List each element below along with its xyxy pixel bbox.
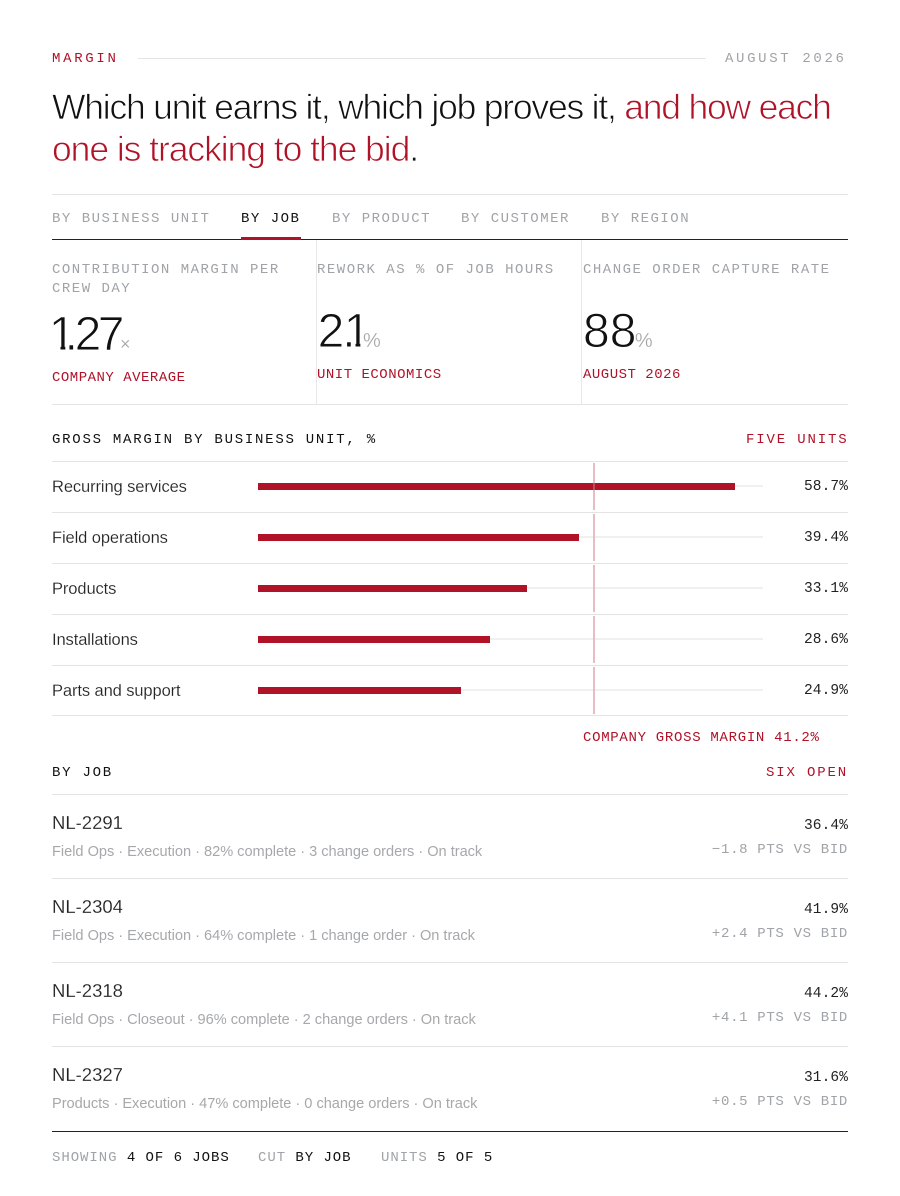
KPI: change order capture: AUGUST 2026 [583, 367, 681, 383]
KPI: rework: UNIT ECONOMICS [317, 367, 442, 383]
heading note: six open: SIX OPEN [766, 765, 848, 781]
job list [52, 812, 848, 1112]
job list: +2.4 PTS VS BID [712, 926, 848, 942]
KPI: contribution margin: .27× [65, 308, 131, 361]
footer status: SHOWING 4 OF 6 JOBS [52, 1150, 230, 1166]
job list: 36.4% [804, 818, 848, 834]
bar chart: 33.1% [804, 581, 848, 597]
KPI: change order capture [583, 262, 831, 383]
row: installations: Installations [52, 631, 138, 649]
KPI: contribution margin: COMPANY AVERAGE [52, 370, 186, 386]
job list: Field Ops · Execution · 82% complete · 3 change orders · On track [52, 844, 482, 860]
bar chart: 28.6% [804, 632, 848, 648]
bar chart: 58.7% [804, 479, 848, 495]
page: UNITS 5 OF 5 [381, 1150, 493, 1166]
bar chart: 39.4% [804, 530, 848, 546]
KPI: contribution margin: CREW DAY [52, 281, 131, 297]
tabs: BY REGION [601, 211, 690, 227]
job list: Field Ops · Closeout · 96% complete · 2 change orders · On track [52, 1012, 476, 1028]
job: NL-2291: NL-2291 [52, 812, 123, 833]
title [52, 87, 831, 169]
eyebrow: date: AUGUST 2026 [725, 51, 847, 67]
company margin reference line [593, 463, 595, 714]
page: CUT BY JOB [258, 1150, 352, 1166]
heading: by job: BY JOB [52, 765, 113, 781]
title: Which unit earns it, which job proves it, and how each [52, 87, 831, 127]
tabs: BY JOB [241, 211, 300, 227]
KPI: contribution margin [52, 262, 280, 386]
reference line label: COMPANY GROSS MARGIN 41.2% [583, 730, 820, 746]
job list: +4.1 PTS VS BID [712, 1010, 848, 1026]
eyebrow: margin: MARGIN [52, 51, 119, 67]
KPI: rework [317, 262, 555, 383]
tabs [52, 211, 690, 227]
row: recurring services: Recurring services [52, 478, 187, 496]
KPI: contribution margin: 1 [49, 308, 75, 361]
KPI: change order capture: CHANGE ORDER CAPTURE RATE [583, 262, 831, 278]
KPI: contribution margin: CONTRIBUTION MARGIN PER [52, 262, 280, 278]
job list: −1.8 PTS VS BID [712, 842, 848, 858]
active tab underline [241, 237, 301, 240]
row: products: Products [52, 580, 116, 598]
row: parts and support: Parts and support [52, 682, 181, 700]
job list: 41.9% [804, 902, 848, 918]
title: one is tracking to the bid. [52, 129, 418, 169]
bar chart [52, 463, 848, 716]
row: field operations: Field operations [52, 529, 168, 547]
bar chart: 24.9% [804, 683, 848, 699]
job list: Field Ops · Execution · 64% complete · 1 change order · On track [52, 928, 475, 944]
job: NL-2327: NL-2327 [52, 1064, 123, 1085]
tabs: BY CUSTOMER [461, 211, 570, 227]
heading: gross margin: GROSS MARGIN BY BUSINESS UNIT, % [52, 432, 377, 448]
job list: 31.6% [804, 1070, 848, 1086]
KPI: change order capture: 88% [583, 305, 653, 358]
job: NL-2318: NL-2318 [52, 980, 123, 1001]
KPI: rework: 2. % [318, 305, 381, 358]
tabs: BY BUSINESS UNIT [52, 211, 210, 227]
job list: +0.5 PTS VS BID [712, 1094, 848, 1110]
job: NL-2304: NL-2304 [52, 896, 123, 917]
heading note: five units: FIVE UNITS [746, 432, 849, 448]
KPI: rework: 1 [344, 305, 370, 358]
job list: 44.2% [804, 986, 848, 1002]
KPI: rework: REWORK AS % OF JOB HOURS [317, 262, 555, 278]
tabs: BY PRODUCT [332, 211, 431, 227]
job list: Products · Execution · 47% complete · 0 change orders · On track [52, 1096, 477, 1112]
